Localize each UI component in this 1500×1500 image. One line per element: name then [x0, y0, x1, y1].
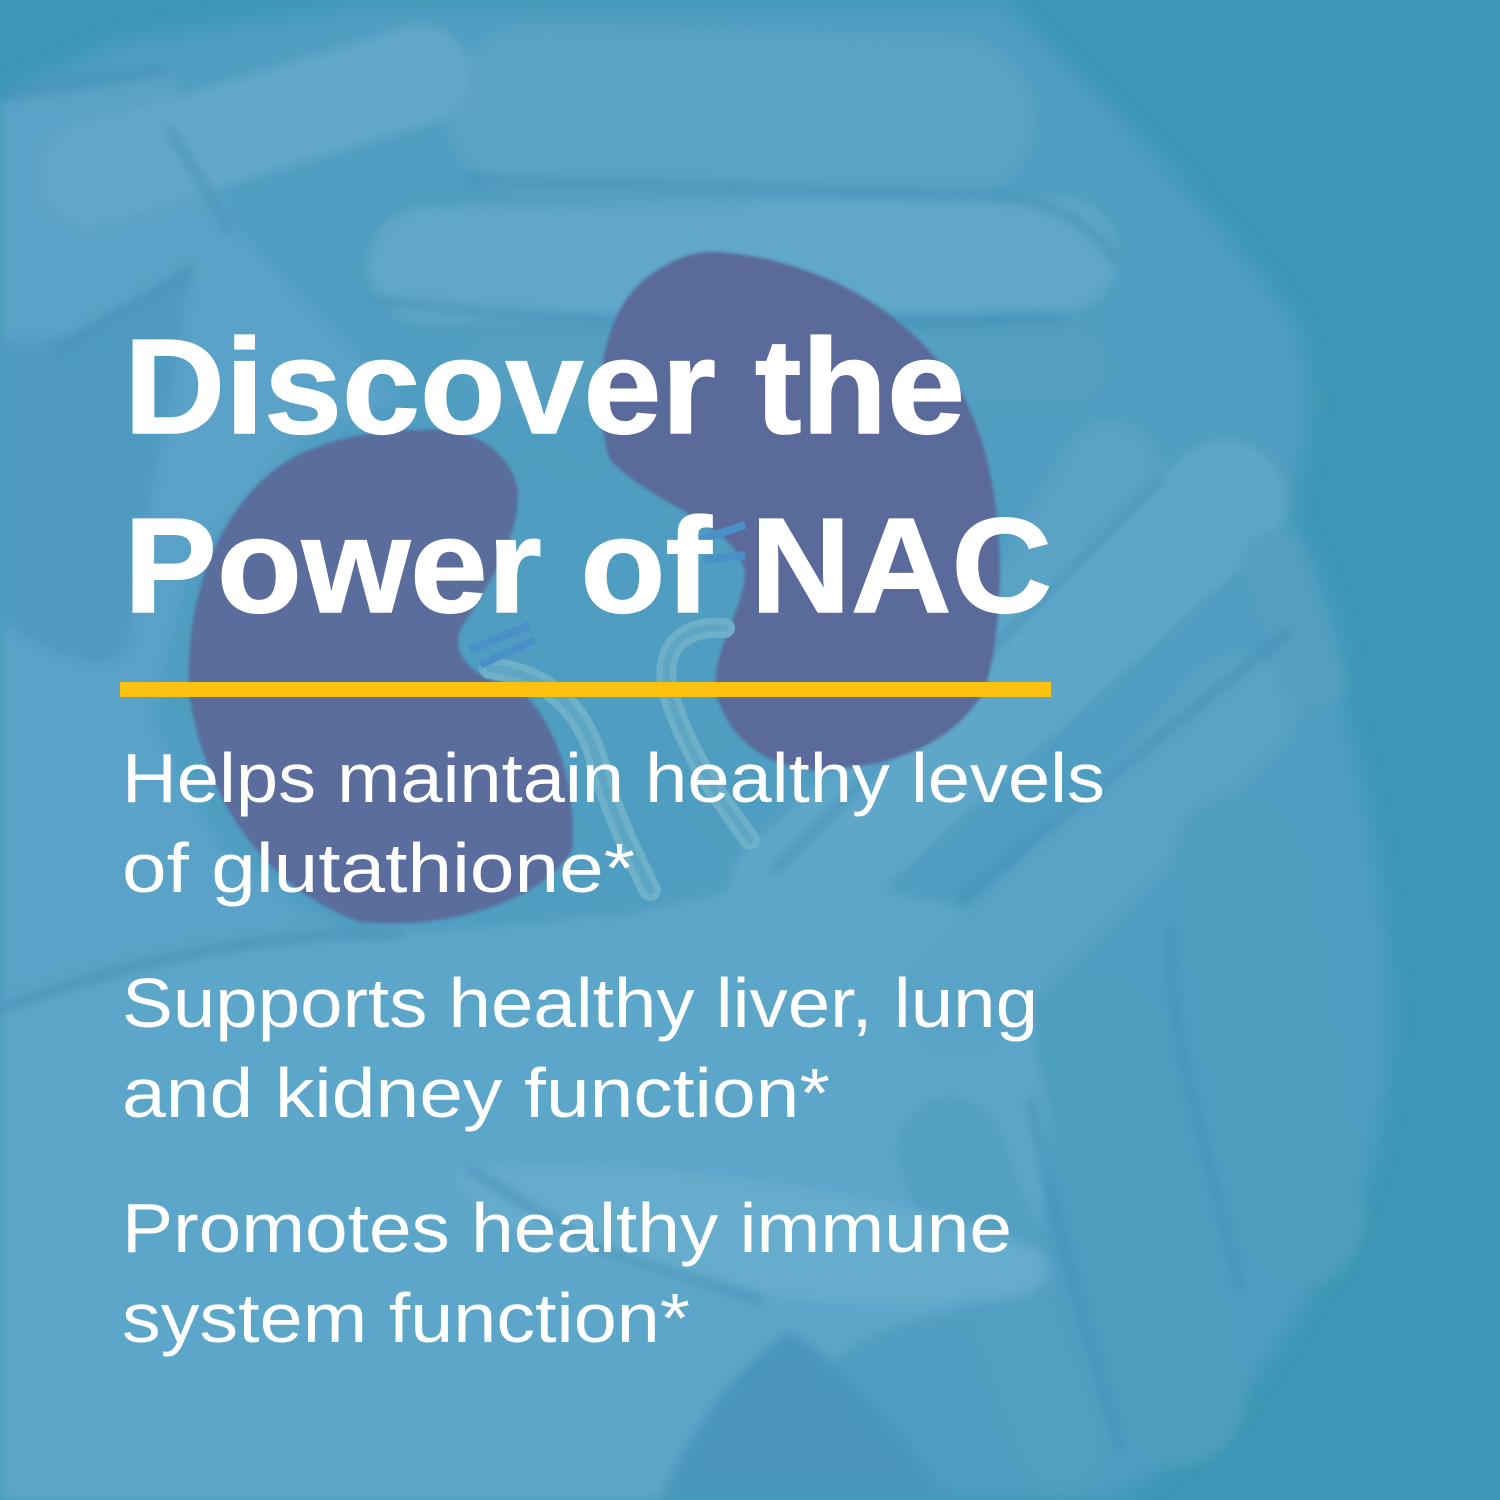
- right kidney: [600, 252, 1000, 770]
- title: [124, 311, 1052, 641]
- benefit: liver, lung and kidney: Supports healthy liver, lung: [122, 964, 1038, 1042]
- yellow divider: [120, 682, 1051, 697]
- central palm between kidneys: [480, 440, 780, 920]
- title: Discover the: [124, 311, 965, 462]
- lower palm: [0, 870, 1050, 1500]
- right fingers: [790, 470, 1310, 1440]
- benefit: immune system: [122, 1189, 1012, 1357]
- upper fingers: [90, 75, 1070, 370]
- benefit: glutathione: [122, 739, 1105, 907]
- hand creases: [0, 70, 1290, 1450]
- blood vessels: [470, 525, 745, 665]
- icon: kidneys: [189, 252, 1000, 923]
- left hand palm: [0, 70, 400, 1010]
- benefit: immune system: Promotes healthy immune: [122, 1189, 1012, 1267]
- ureters: [490, 628, 750, 890]
- thumb base shadow: [0, 270, 190, 662]
- benefit: glutathione: of glutathione*: [122, 829, 635, 907]
- title: Power of NAC: [124, 490, 1052, 641]
- benefit: liver, lung and kidney: [122, 964, 1038, 1132]
- benefit: immune system: system function*: [122, 1279, 690, 1357]
- benefit: liver, lung and kidney: and kidney function*: [122, 1054, 830, 1132]
- benefit: glutathione: Helps maintain healthy levels: [122, 739, 1105, 817]
- left kidney: [189, 429, 573, 923]
- lower thumb: [450, 1165, 1048, 1305]
- lower hand shadow: [660, 1330, 950, 1500]
